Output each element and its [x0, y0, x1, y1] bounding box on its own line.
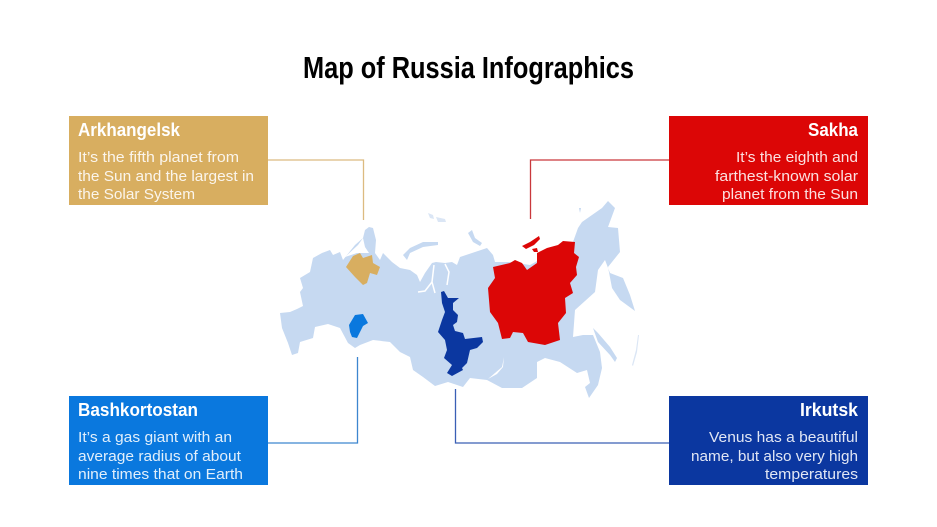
text: Irkutsk description — [691, 429, 858, 483]
region: Bashkortostan — [349, 314, 368, 338]
Sakhalin — [593, 328, 617, 362]
region: Sakha — [488, 236, 579, 345]
heading: Sakha: Sakha — [808, 120, 859, 140]
heading: Irkutsk: Irkutsk — [800, 400, 859, 420]
text: Bashkortostan description: average radius of about — [78, 448, 242, 465]
panel: Irkutsk — [669, 396, 868, 485]
text: Arkhangelsk description: It’s the fifth planet from — [78, 149, 239, 166]
small northern islands — [428, 213, 639, 366]
Novaya Zemlya — [403, 242, 438, 260]
text: Sakha description — [715, 149, 858, 203]
connector: Sakha — [530, 160, 669, 219]
text: Arkhangelsk description: the Sun and the largest in — [78, 168, 254, 185]
connector: Irkutsk — [456, 389, 669, 443]
panel: Arkhangelsk — [69, 116, 268, 205]
heading: Bashkortostan: Bashkortostan — [78, 400, 198, 420]
Severnaya Zemlya — [468, 230, 482, 246]
text: Irkutsk description: Venus has a beautiful — [709, 429, 858, 446]
base map — [280, 201, 635, 398]
text: Arkhangelsk description: the Solar System — [78, 186, 195, 203]
connector: Bashkortostan — [268, 357, 358, 443]
panel: Sakha — [669, 116, 868, 205]
title: Map of Russia Infographics — [303, 50, 634, 85]
connector: Arkhangelsk — [268, 160, 364, 220]
region: Irkutsk — [438, 291, 483, 376]
region: Arkhangelsk — [346, 253, 380, 285]
text: Arkhangelsk description — [78, 149, 254, 203]
White Sea — [345, 238, 369, 257]
text: Bashkortostan description — [78, 429, 243, 483]
text: Sakha description: planet from the Sun — [722, 186, 858, 203]
text: Bashkortostan description: nine times that on Earth — [78, 466, 243, 483]
panel: Bashkortostan — [69, 396, 268, 485]
Lake Baikal — [488, 357, 504, 379]
heading: Arkhangelsk: Arkhangelsk — [78, 120, 181, 140]
text: Irkutsk description: name, but also very high — [691, 448, 858, 465]
text: Sakha description: It’s the eighth and — [736, 149, 858, 166]
text: Irkutsk description: temperatures — [765, 466, 858, 483]
text: Bashkortostan description: It’s a gas giant with an — [78, 429, 232, 446]
text: Sakha description: farthest-known solar — [715, 168, 858, 185]
river gulfs — [418, 264, 449, 293]
Wrangel Island — [579, 208, 581, 213]
map of Russia — [280, 201, 639, 398]
